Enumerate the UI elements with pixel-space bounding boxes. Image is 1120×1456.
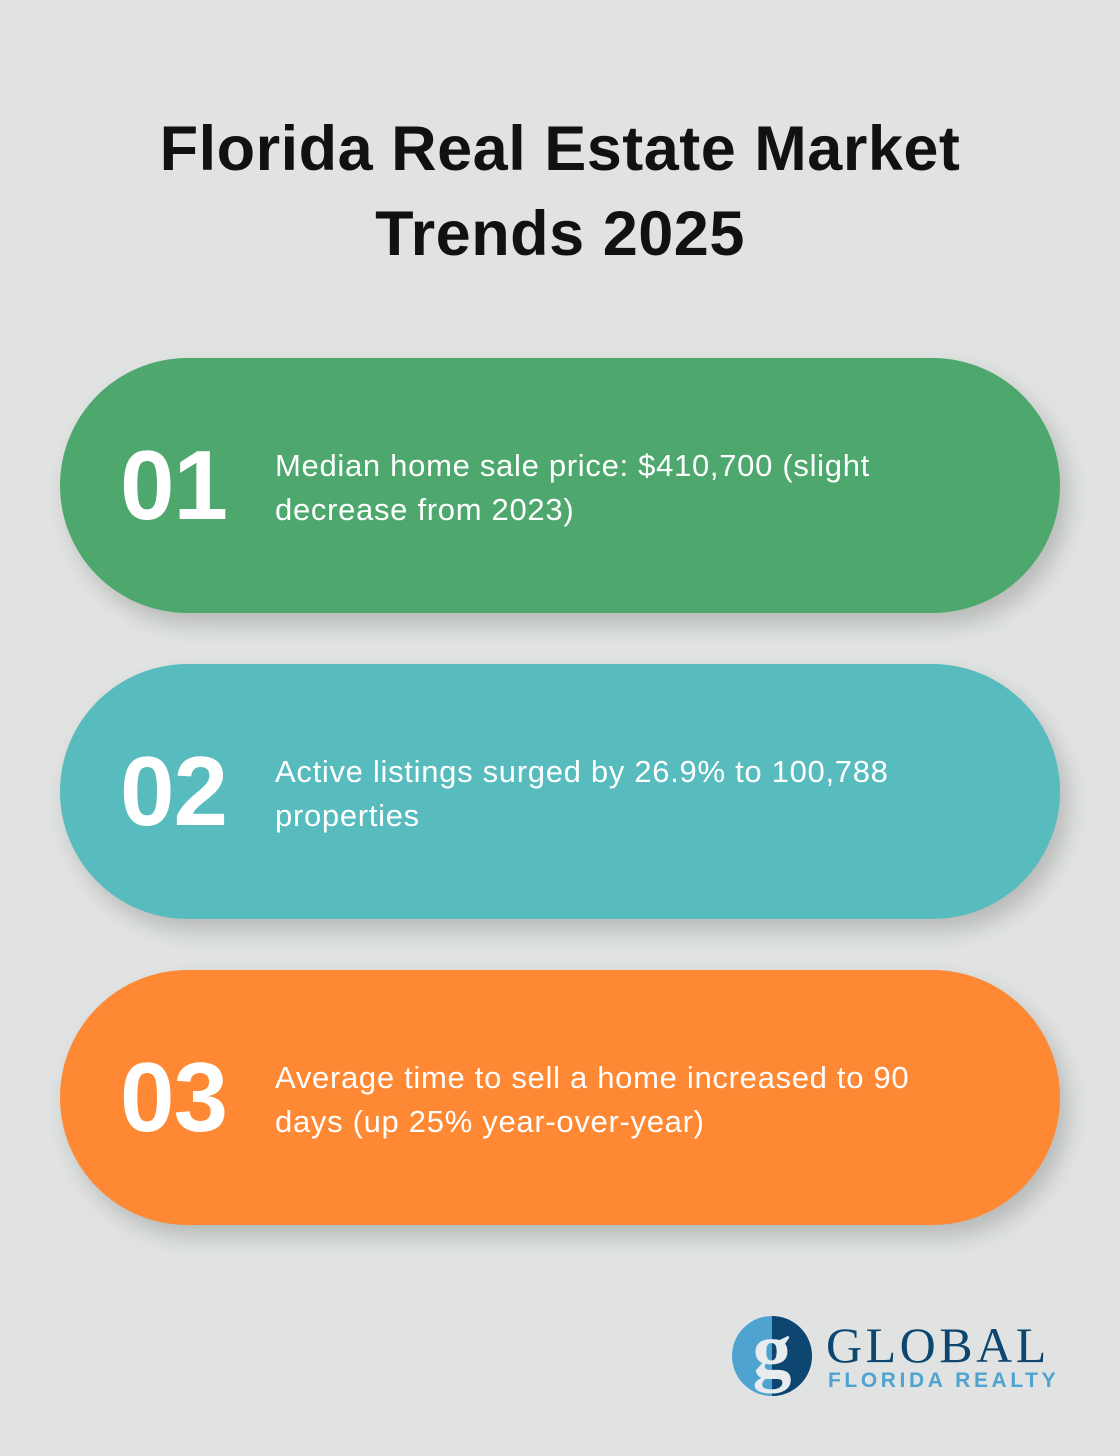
panel: 02 active listings: [60, 664, 1060, 919]
text 01: Median home sale price: $410,700 (slight decrease from 2023): [275, 448, 870, 527]
logo wordmark: GLOBAL: [826, 1317, 1050, 1373]
title: [160, 114, 960, 269]
panel: 01 median price: [60, 358, 1060, 613]
panel: 03 time to sell: [60, 970, 1060, 1225]
number 01: 01: [120, 430, 227, 540]
logo subtitle: FLORIDA REALTY: [828, 1369, 1059, 1392]
text 02: Active listings surged by 26.9% to 100,788 properties: [275, 754, 889, 833]
logo: Global Florida Realty: [732, 1314, 1059, 1396]
title: Trends 2025: [375, 199, 745, 269]
icon: g circle: [732, 1314, 812, 1396]
title: Florida Real Estate Market: [160, 114, 960, 184]
text 03: Average time to sell a home increased to 90 days (up 25% year-over-year): [275, 1060, 909, 1139]
number 02: 02: [120, 736, 227, 846]
number 03: 03: [120, 1042, 227, 1152]
